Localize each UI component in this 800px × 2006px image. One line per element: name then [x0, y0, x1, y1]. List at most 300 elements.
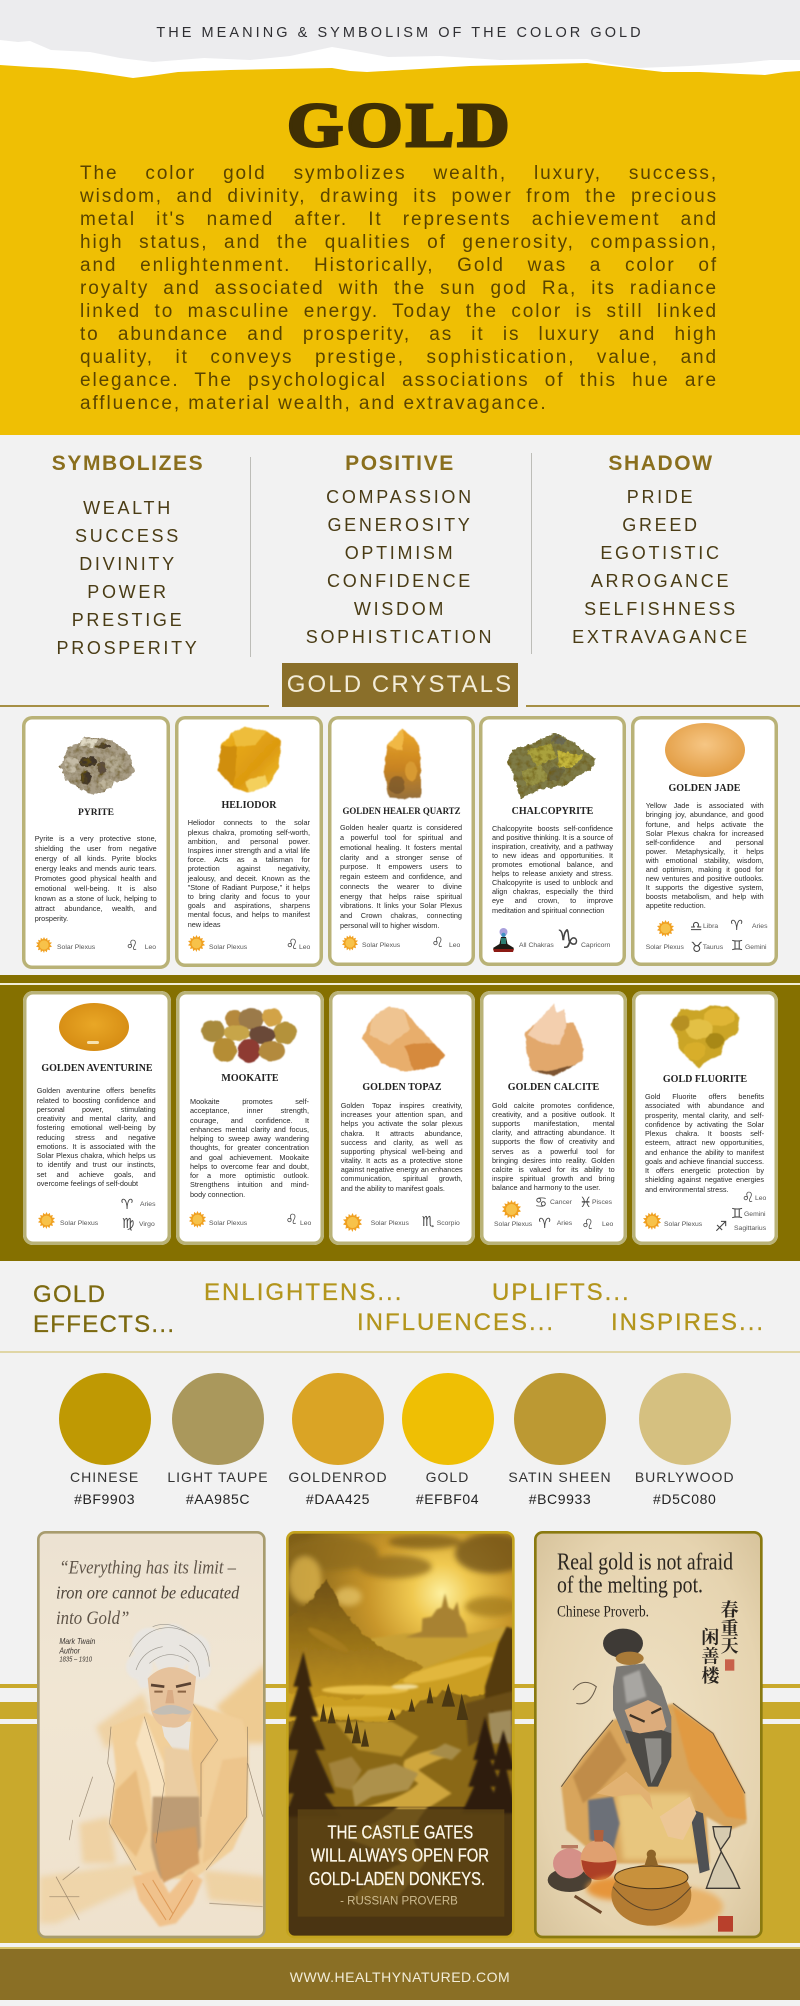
swatch label: GOLD: [426, 1469, 469, 1485]
panel: chinese proverb: 楼: [701, 1662, 721, 1688]
left mountain: [285, 1580, 425, 1700]
swatch: gold: [402, 1373, 494, 1465]
river: [363, 1748, 452, 1807]
footer bar: WWW.HEALTHYNATURED.COM: [290, 1969, 510, 1985]
swatch label: #BC9933: [529, 1491, 591, 1507]
description: bringing desires into reality. Golden: [492, 1156, 615, 1165]
panel: chinese proverb: Chinese Proverb.: [557, 1604, 649, 1621]
description: serves as a powerful tool for: [492, 1147, 615, 1156]
list: symbolizes: WEALTH: [83, 498, 173, 518]
description: promotes emotional balance, and: [492, 860, 613, 869]
description: energy that helps raise spiritual: [340, 892, 462, 901]
description: a powerful tool for spiritual and: [340, 833, 462, 842]
description: [190, 1097, 309, 1198]
description: inspire spiritual growth and bring: [492, 1174, 615, 1183]
description: esteem, attract new opportunities,: [645, 1138, 764, 1147]
label: Leo: [299, 944, 310, 951]
effect: enlightens: ENLIGHTENS...: [204, 1279, 403, 1306]
effects heading: [33, 1281, 175, 1338]
description: connects the wearer to divine: [340, 882, 462, 891]
icon: sun: [502, 1200, 521, 1219]
description: and positive thinking. It is a source of: [492, 833, 613, 842]
description: Strengthens intuition and mind-: [190, 1180, 309, 1189]
hair: [603, 1629, 643, 1658]
icon: leo: ♌︎: [126, 938, 138, 954]
icon: all chakras: [493, 928, 514, 952]
label: Leo: [449, 942, 460, 949]
jacket: [110, 1703, 249, 1880]
description: personal power, stimulating: [37, 1105, 156, 1114]
left tree: [288, 1652, 336, 1816]
icon: gemini: ♊︎: [731, 938, 743, 954]
description: Golden healer quartz is considered: [340, 823, 462, 832]
icon: sun: [343, 1213, 362, 1232]
description: shielding the user from negative: [35, 844, 157, 853]
label: Solar Plexus: [371, 1220, 409, 1227]
rocks: [328, 1757, 362, 1790]
intro paragraph: royalty and associated with the sun god Ra, its radiance: [80, 278, 718, 299]
icon: sun: [36, 937, 52, 953]
list: positive: GENEROSITY: [327, 515, 473, 535]
hair: [126, 1624, 211, 1688]
icon: sagittarius: ♐︎: [715, 1219, 727, 1235]
description: inspiration, creativity, and a pathway: [492, 842, 613, 851]
title: GOLDEN CALCITE: [508, 1082, 599, 1093]
icon: taurus: ♉︎: [690, 940, 703, 956]
icon: aries: ♈︎: [538, 1216, 551, 1232]
yellow panel: [0, 80, 800, 435]
description: Inspires inner strength and a vital life: [188, 846, 310, 855]
intro paragraph: elegance. The psychological associations of this hue are: [80, 370, 718, 391]
panel: mark twain quote: iron ore cannot be educated: [56, 1582, 240, 1602]
label: Leo: [145, 944, 156, 951]
description: energy leaks and mends auric tears.: [35, 864, 157, 873]
intro paragraph: quality, it conveys prestige, sophistication, value, and: [80, 347, 718, 368]
title: MOOKAITE: [221, 1073, 279, 1084]
description: Chalcopyrite is used to unblock and: [492, 878, 613, 887]
description: clarity and a stronger sense of: [340, 853, 462, 862]
image: pyrite: [58, 736, 135, 795]
intro paragraph: linked to masculine energy. Today the color is still linked: [80, 301, 718, 322]
list: positive: SOPHISTICATION: [306, 627, 494, 647]
description: energy of all kinds. Pyrite blocks: [35, 854, 157, 863]
description: Golden aventurine offers benefits: [37, 1086, 156, 1095]
quote box: [298, 1809, 504, 1917]
card: heliodor: [175, 716, 323, 967]
label: Solar Plexus: [57, 944, 95, 951]
description: force. Acts as a talisman for: [188, 855, 310, 864]
description: helps you activate the solar plexus: [341, 1119, 463, 1128]
swatch label: [288, 1469, 388, 1507]
description: Gold calcite promotes confidence,: [492, 1101, 615, 1110]
gold lower background: [0, 1724, 800, 1943]
label: Libra: [703, 923, 718, 930]
description: appetite reduction.: [646, 901, 706, 910]
description: prosperity, mental clarity, and self-: [645, 1110, 764, 1120]
panel: mark twain quote: Mark Twain: [59, 1636, 96, 1646]
label: Solar Plexus: [646, 944, 684, 951]
swatch label: LIGHT TAUPE: [167, 1469, 269, 1485]
description: associated with abundance and: [645, 1101, 764, 1110]
description: and the ability to manifest goals.: [341, 1184, 445, 1193]
title: GOLDEN JADE: [669, 783, 740, 794]
panel: mark twain quote: Author: [58, 1645, 81, 1655]
swatch label: #EFBF04: [416, 1491, 479, 1507]
effect: influences: INFLUENCES...: [357, 1309, 555, 1336]
face: [624, 1700, 666, 1734]
description: creativity, and a positive outlook. It: [492, 1110, 615, 1119]
list: symbolizes: POWER: [87, 582, 169, 602]
icon: leo: ♌︎: [285, 1212, 298, 1228]
swatch label: SATIN SHEEN: [508, 1469, 612, 1485]
swatch label: #BF9903: [74, 1491, 135, 1507]
list: symbolizes: PROSPERITY: [56, 638, 200, 658]
swatch: goldenrod: [292, 1373, 384, 1465]
effect: inspires: INSPIRES...: [611, 1309, 765, 1336]
label: Capricorn: [581, 942, 610, 949]
label: Solar Plexus: [362, 942, 400, 949]
description: plexus chakra, promoting self-worth,: [188, 828, 310, 837]
description: fortune, and helps activate the: [646, 820, 764, 829]
description: attract abundance, wealth, and: [35, 904, 157, 913]
castle: [405, 1593, 468, 1637]
panel: mark twain quote: [37, 1531, 690, 1938]
icon: cancer: ♋︎: [535, 1195, 547, 1211]
card: golden calcite: [480, 991, 627, 1245]
list: shadow: GREED: [622, 515, 700, 535]
quote box: GOLD-LADEN DONKEYS.: [309, 1868, 485, 1889]
label: Leo: [300, 1220, 311, 1227]
list: shadow: [572, 487, 750, 647]
panel: mark twain quote: 1835 – 1910: [59, 1657, 92, 1664]
pot: [611, 1864, 691, 1926]
description: [36, 1086, 156, 1188]
image: jade: [665, 723, 745, 777]
label: Sagittarius: [734, 1225, 766, 1232]
description: enhances mental clarity and focus,: [190, 1125, 309, 1134]
description: emotional well-being. It is also: [35, 884, 157, 893]
description: personal will to higher wisdom.: [340, 921, 439, 930]
card: gold fluorite: [632, 991, 778, 1245]
description: body connection.: [190, 1190, 245, 1198]
description: helping to sweep away wandering: [190, 1134, 309, 1143]
swatch: light taupe: [172, 1373, 264, 1465]
list: symbolizes: PRESTIGE: [72, 610, 184, 630]
label: Leo: [602, 1221, 613, 1228]
description: meditation and spiritual connection: [492, 906, 604, 915]
description: [645, 1092, 764, 1194]
image: aventurine: [59, 1003, 129, 1051]
list: positive: OPTIMISM: [345, 543, 455, 563]
beard: [625, 1730, 671, 1787]
description: vitality. It acts as a protective stone: [341, 1156, 463, 1165]
description: thoughts, for greater concentration: [190, 1143, 309, 1152]
intro paragraph: and enlightenment. Historically, Gold was a color of: [80, 255, 718, 276]
flasks: [548, 1871, 592, 1892]
icon: aries: ♈︎: [730, 918, 743, 934]
right cliff: [484, 1626, 512, 1714]
label: Solar Plexus: [60, 1220, 98, 1227]
footer bar: [0, 1949, 800, 2000]
label: All Chakras: [519, 942, 554, 949]
label: Scorpio: [437, 1220, 460, 1227]
description: goals and aspirations, sharpens: [188, 901, 310, 910]
description: align chakras, especially the third: [492, 887, 613, 896]
icon: leo: ♌︎: [431, 935, 444, 951]
description: Gold Fluorite offers benefits: [645, 1092, 764, 1101]
description: Golden Topaz inspires creativity,: [341, 1101, 463, 1110]
label: Cancer: [550, 1199, 572, 1206]
panel: mark twain quote: into Gold”: [56, 1608, 129, 1629]
description: new ventures and positive outlooks.: [646, 874, 764, 883]
swatch: burlywood: [639, 1373, 731, 1465]
hands: [596, 1772, 653, 1810]
swatch label: GOLDENROD: [288, 1469, 388, 1485]
heading: positive: POSITIVE: [345, 452, 455, 475]
list: shadow: SELFISHNESS: [584, 599, 738, 619]
banner: gold crystals: GOLD CRYSTALS: [287, 671, 513, 698]
panel: chinese proverb: of the melting pot.: [557, 1573, 703, 1599]
title: GOLD FLUORITE: [663, 1074, 747, 1085]
midground: [288, 1690, 512, 1806]
description: and environmental stress.: [645, 1184, 729, 1194]
icon: gemini: ♊︎: [731, 1206, 743, 1222]
description: emotional healing. It fosters mental: [340, 843, 462, 852]
hands: [133, 1870, 203, 1927]
description: related to boosting confidence and: [37, 1096, 156, 1105]
icon: leo: ♌︎: [286, 937, 298, 953]
description: Heliodor connects to the solar: [188, 818, 310, 827]
title: HELIODOR: [221, 800, 276, 811]
title: GOLDEN TOPAZ: [362, 1082, 442, 1093]
description: and optimism, making it good for: [646, 865, 764, 874]
description: goals and achieve financial success.: [645, 1157, 764, 1166]
description: [188, 818, 310, 929]
panel: chinese proverb: 闲: [701, 1623, 719, 1649]
dark gold band: [0, 975, 800, 1261]
top title line: THE MEANING & SYMBOLISM OF THE COLOR GOLD: [156, 25, 644, 41]
description: balance and harmony to the user.: [492, 1183, 600, 1192]
image: mookaite: [200, 1007, 298, 1064]
card: golden healer quartz: [328, 716, 475, 966]
heading: shadow: SHADOW: [608, 452, 714, 475]
label: Solar Plexus: [664, 1221, 702, 1228]
description: [492, 1101, 615, 1192]
description: overcome feelings of self-doubt: [37, 1179, 138, 1188]
description: self-confidence and personal: [646, 838, 764, 847]
sketch lines: [49, 1703, 263, 1920]
label: Solar Plexus: [494, 1221, 532, 1228]
list: symbolizes: SUCCESS: [75, 526, 181, 546]
icon: capricorn: ♑︎: [556, 925, 580, 955]
description: bringing joy, abundance, and good: [646, 810, 764, 819]
label: Aries: [752, 923, 768, 930]
swatch label: CHINESE: [70, 1469, 139, 1485]
card: mookaite: [176, 991, 324, 1245]
icon: sun: [342, 935, 358, 951]
label: Pisces: [592, 1199, 612, 1206]
list: positive: [306, 487, 494, 647]
description: confidence by activating the Solar: [645, 1120, 764, 1129]
card: pyrite: [22, 716, 170, 969]
description: for a more optimistic outlook.: [190, 1171, 309, 1180]
intro paragraph: high status, and the qualities of generosity, compassion,: [80, 232, 718, 253]
face: [148, 1667, 196, 1728]
list: symbolizes: [56, 498, 200, 658]
swatch label: [635, 1466, 735, 1510]
panel: chinese proverb: 春: [721, 1596, 739, 1622]
description: [646, 801, 764, 910]
list: positive: COMPASSION: [326, 487, 474, 507]
torn paper header background: [0, 40, 800, 80]
intro paragraph: The color gold symbolizes wealth, luxury, success,: [80, 163, 718, 184]
description: helps to release anxiety and stress.: [492, 869, 613, 878]
description: It offers energetic protection by: [645, 1166, 764, 1175]
description: regain esteem and confidence, and: [340, 872, 462, 881]
swatch label: #DAA425: [306, 1491, 370, 1507]
card: golden aventurine: [23, 991, 171, 1245]
effects heading: GOLD: [33, 1281, 106, 1308]
swatch label: [508, 1466, 612, 1510]
list: symbolizes: DIVINITY: [79, 554, 177, 574]
list: positive: WISDOM: [354, 599, 446, 619]
description: acceptance, inner strength,: [190, 1106, 309, 1115]
clouds: [285, 1533, 528, 1617]
banner: gold crystals: [282, 663, 518, 707]
description: success and clarity, as well as: [341, 1138, 463, 1147]
title: GOLDEN AVENTURINE: [41, 1063, 153, 1074]
description: to identify and trust our instincts,: [37, 1160, 156, 1169]
label: Gemini: [745, 944, 767, 951]
image: fluorite: [670, 1004, 740, 1069]
description: against negative energy an enhances: [341, 1165, 463, 1174]
image: topaz: [361, 1006, 446, 1072]
description: supports the flow of creativity and: [492, 1137, 615, 1146]
description: jealousy, and deceit. Known as the: [188, 874, 310, 883]
description: and enhance the ability to manifest: [645, 1148, 764, 1156]
panel: russian proverb: [286, 1531, 515, 1938]
label: Taurus: [703, 944, 723, 951]
description: ambition, and personal power.: [188, 837, 310, 846]
intro paragraph: to abundance and prosperity, as it is luxury and high: [80, 324, 718, 345]
description: shielding against negative energies: [645, 1175, 764, 1184]
swatch label: BURLYWOOD: [635, 1469, 735, 1485]
description: boosts metabolism, and help with: [646, 892, 764, 901]
description: Mookaite promotes self-: [190, 1097, 309, 1106]
card: golden topaz: [329, 991, 475, 1245]
description: protection against negativity,: [188, 864, 310, 873]
description: chakra. It attracts abundance,: [341, 1129, 463, 1138]
ground: [285, 1807, 517, 1940]
image: chalcopyrite: [507, 733, 596, 799]
image: calcite: [524, 1003, 584, 1077]
robe: [561, 1703, 746, 1863]
label: Aries: [557, 1220, 572, 1227]
quote box: WILL ALWAYS OPEN FOR: [311, 1845, 489, 1866]
description: creativity and mental clarity, and: [37, 1114, 156, 1123]
description: [492, 824, 614, 915]
title: GOLDEN HEALER QUARTZ: [342, 806, 461, 816]
icon: scorpio: ♏︎: [422, 1214, 434, 1230]
list: shadow: EXTRAVAGANCE: [572, 627, 750, 647]
description: reducing stress and negative: [37, 1133, 156, 1142]
description: Yellow Jade is associated with: [646, 801, 764, 810]
heading: GOLD: GOLD: [287, 92, 513, 160]
description: helps to overcome fear and doubt,: [190, 1162, 309, 1171]
list: shadow: EGOTISTIC: [600, 543, 722, 563]
swatch label: #D5C080: [653, 1491, 716, 1507]
sketch wash: [39, 1663, 266, 1923]
description: and goal achievement. Mookaite: [190, 1152, 309, 1162]
sleeves: [588, 1797, 620, 1850]
description: [35, 834, 157, 923]
description: known as a stone of luck, helping to: [35, 894, 157, 903]
small trees: [320, 1683, 468, 1747]
label: Leo: [755, 1195, 766, 1202]
heading: symbolizes: SYMBOLIZES: [52, 452, 204, 475]
icon: pisces: ♓︎: [579, 1195, 592, 1211]
card: golden jade: [631, 716, 778, 966]
image: heliodor: [216, 726, 282, 794]
description: Promotes good physical health and: [35, 874, 157, 883]
title: PYRITE: [78, 808, 114, 818]
description: prosperity.: [35, 914, 68, 923]
intro paragraph: [80, 163, 718, 414]
icon: leo: ♌︎: [581, 1217, 594, 1233]
description: to bring clarity and focus to your: [188, 892, 310, 901]
panel: chinese proverb: 天: [721, 1632, 739, 1658]
swatch: satin sheen: [514, 1373, 606, 1465]
description: Pyrite is a very protective stone,: [35, 834, 157, 843]
card: chalcopyrite: [479, 716, 626, 966]
intro paragraph: metal it's named after. It represents achievement and: [80, 209, 718, 230]
panel: mark twain quote: “Everything has its limit –: [59, 1557, 236, 1578]
title: CHALCOPYRITE: [512, 806, 593, 817]
description: increases your attention span, and: [341, 1110, 463, 1119]
label: Gemini: [744, 1211, 766, 1218]
icon: sun: [643, 1212, 661, 1230]
label: Solar Plexus: [209, 944, 247, 951]
description: [340, 823, 462, 930]
description: to new ideas and opportunities. It: [492, 851, 613, 860]
quote box: - RUSSIAN PROVERB: [340, 1894, 458, 1908]
description: supports manifestation, mental: [492, 1119, 615, 1128]
label: Aries: [140, 1201, 156, 1208]
glass vase: [706, 1827, 740, 1888]
label: Solar Plexus: [209, 1220, 247, 1227]
description: eye and crown, to improve: [492, 896, 613, 905]
icon: sun: [189, 1211, 206, 1228]
description: It supports the digestive system,: [646, 883, 764, 892]
list: shadow: PRIDE: [627, 487, 695, 507]
image: quartz: [382, 728, 422, 800]
description: fostering emotional well-being by: [37, 1123, 156, 1132]
swatch: chinese: [59, 1373, 151, 1465]
swatch label: [167, 1469, 269, 1507]
panel: chinese proverb: Real gold is not afraid: [557, 1549, 733, 1575]
right trees: [462, 1717, 517, 1813]
icon: sun: [657, 920, 674, 937]
icon: virgo: ♍︎: [122, 1216, 134, 1232]
description: [340, 1101, 463, 1193]
valley: [288, 1640, 500, 1723]
description: calcite is valued for its ability to: [492, 1165, 615, 1174]
swatch label: [416, 1469, 479, 1507]
effects heading: EFFECTS...: [33, 1311, 175, 1338]
description: Solar Plexus chakra, which helps us: [37, 1151, 156, 1160]
panel: chinese proverb: 善: [701, 1643, 719, 1669]
description: and Crown chakras, connecting: [340, 911, 462, 920]
